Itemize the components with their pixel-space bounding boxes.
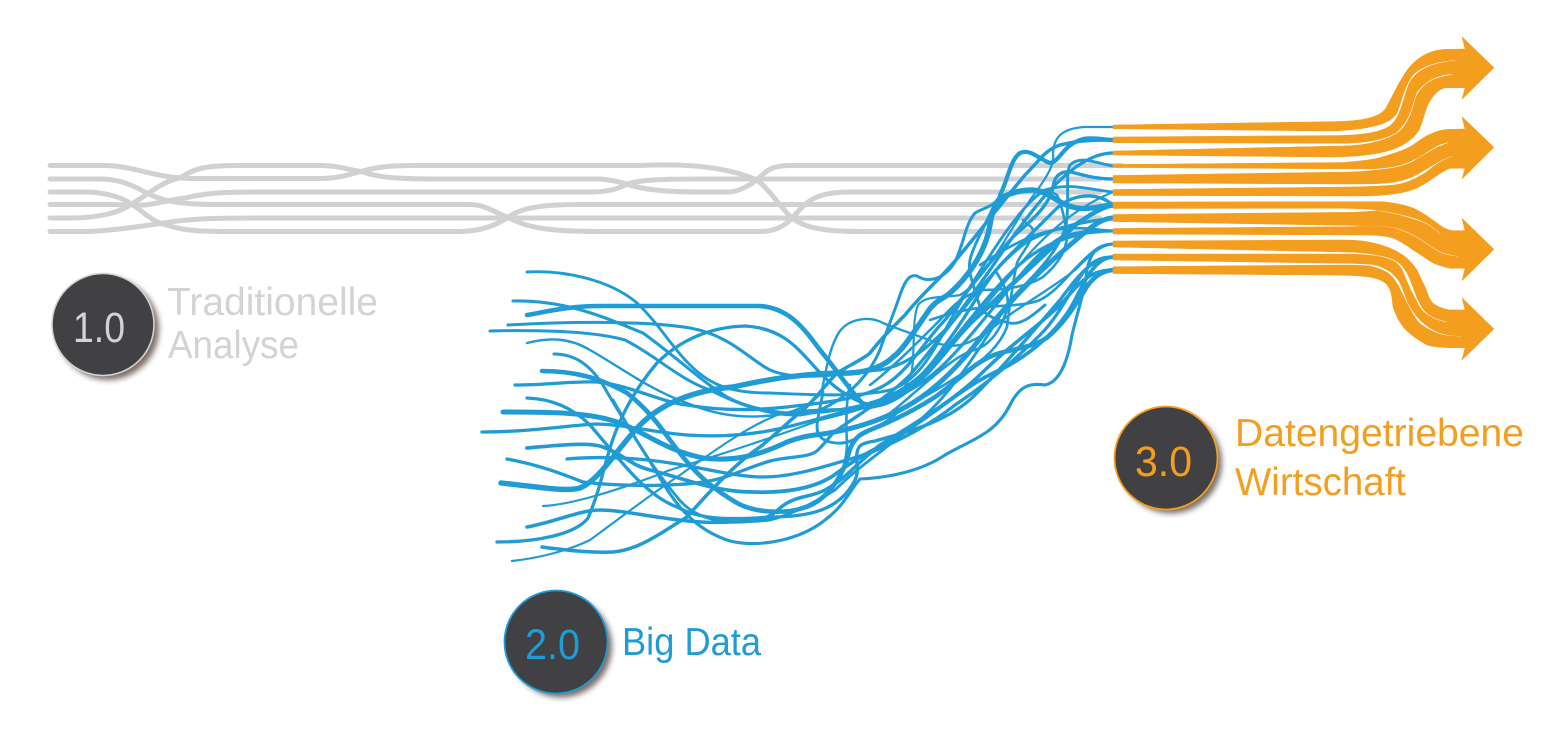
label: Datengetriebene Wirtschaft: Wirtschaft xyxy=(1235,461,1406,504)
arrow: upper xyxy=(1113,37,1494,157)
orange strands: data-driven economy flow xyxy=(1113,37,1494,360)
label: Big Data: Big Data xyxy=(622,621,761,664)
badge: 2.0 xyxy=(504,590,612,698)
badge: 1.0: 1.0 xyxy=(73,304,125,352)
badge: 3.0: 3.0 xyxy=(1135,438,1192,486)
badge: 2.0: 2.0 xyxy=(525,621,580,669)
badge: 1.0 xyxy=(52,274,159,380)
label: Traditionelle Analyse: Analyse xyxy=(168,324,299,367)
label: Traditionelle Analyse: Traditionelle xyxy=(167,281,378,324)
label: Datengetriebene Wirtschaft xyxy=(1235,412,1524,504)
label: Traditionelle Analyse xyxy=(167,281,378,367)
arrow: lower xyxy=(1113,240,1494,360)
blue strands: big data flow xyxy=(482,127,1113,561)
label: Datengetriebene Wirtschaft: Datengetriebene xyxy=(1235,412,1524,455)
badge: 3.0 xyxy=(1114,406,1222,514)
gray strands: traditional analysis flow xyxy=(50,165,1122,232)
arrow: third xyxy=(1113,202,1494,281)
arrow: second xyxy=(1113,117,1494,196)
